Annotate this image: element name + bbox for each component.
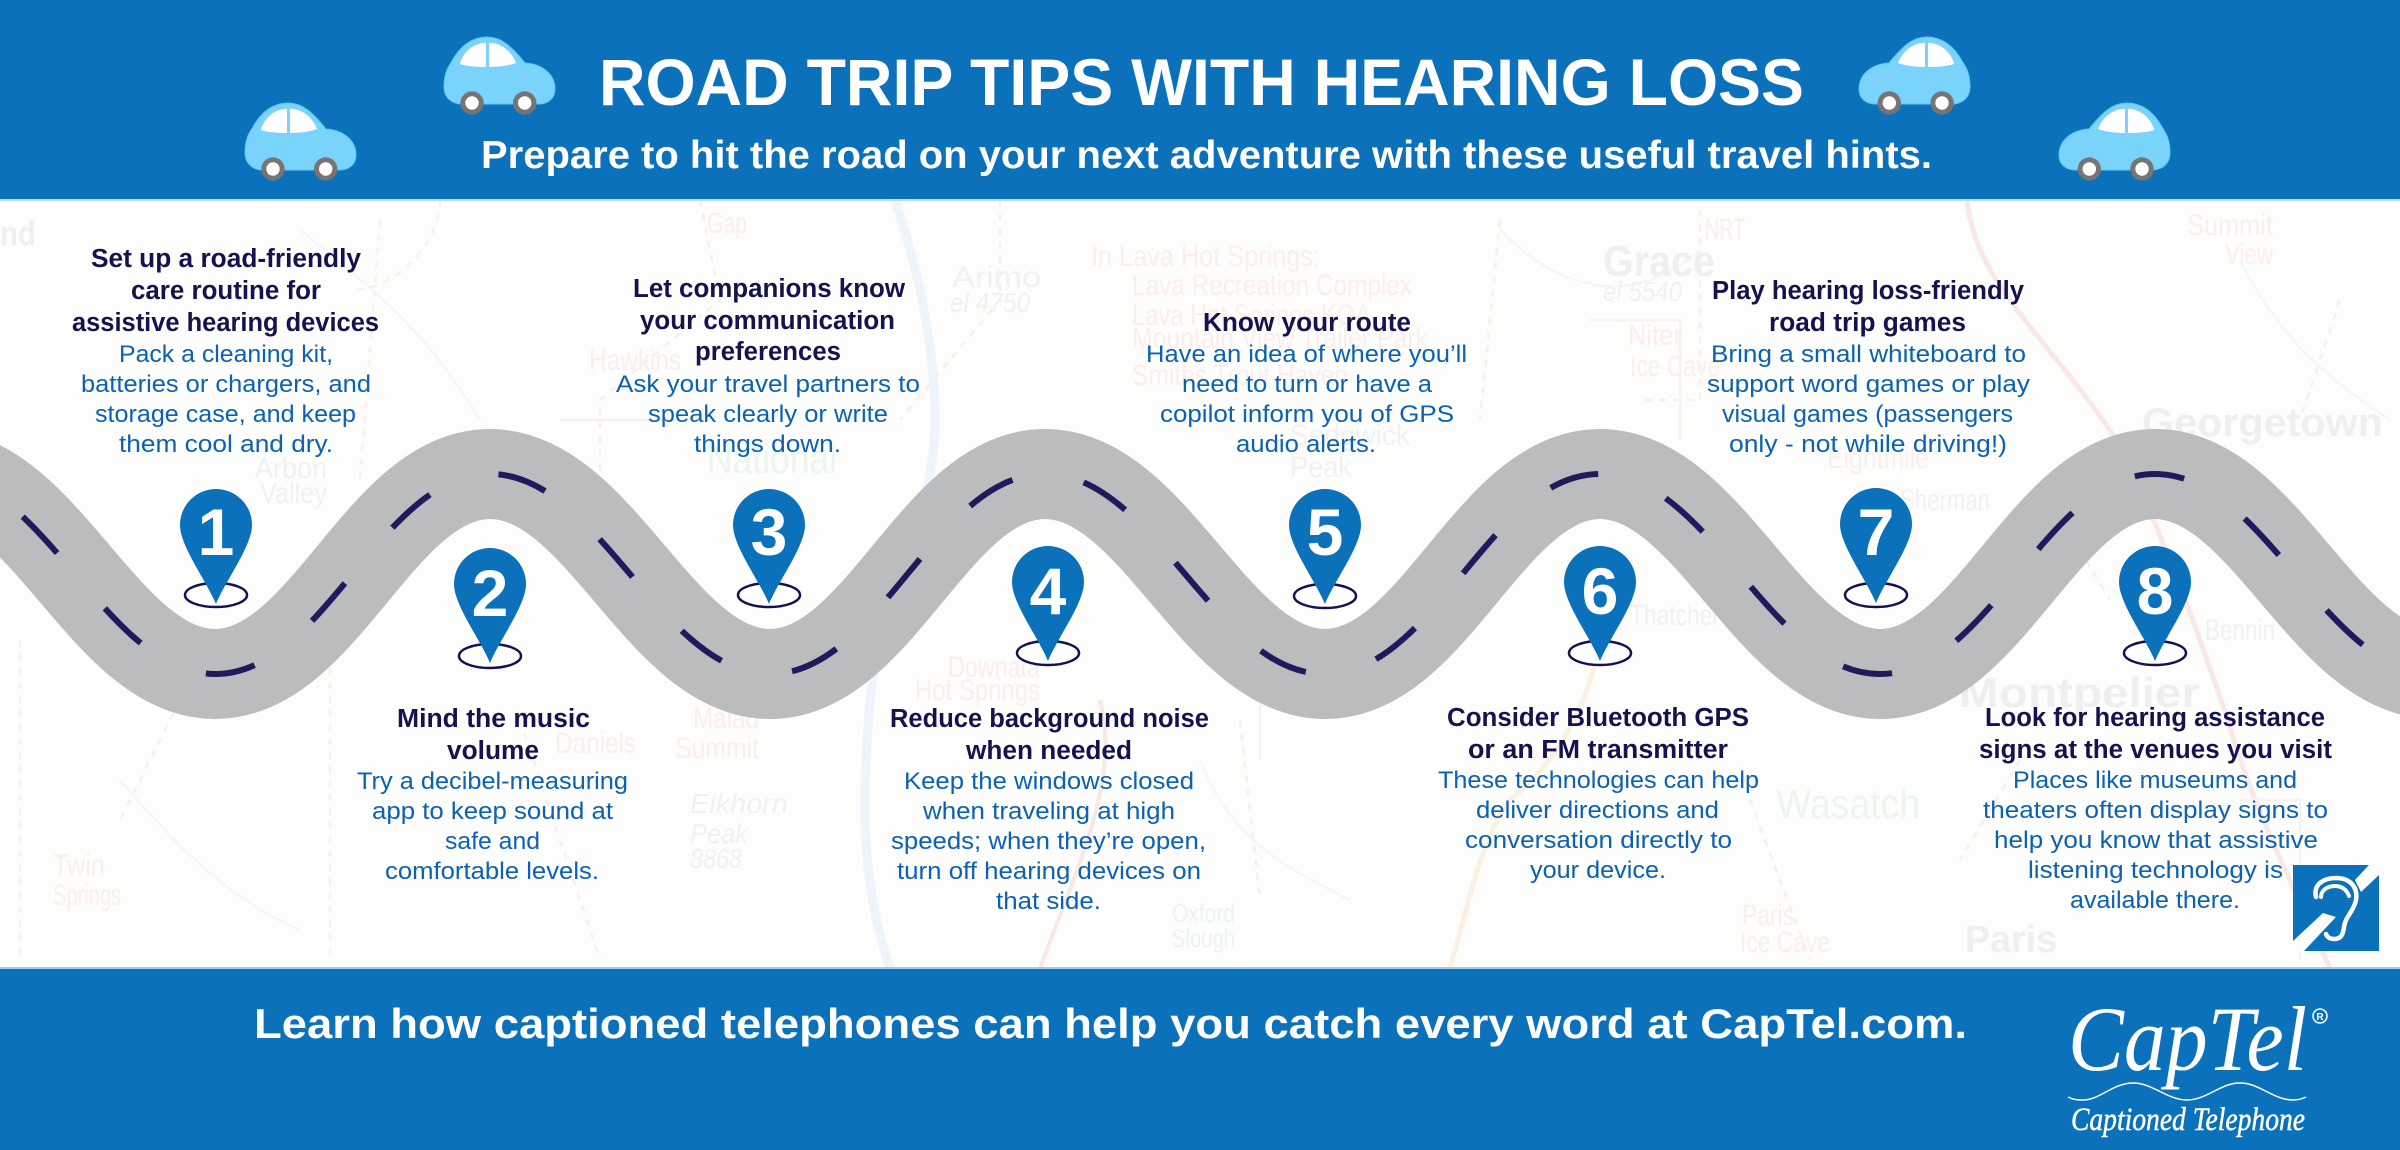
tip 1 text: assistive hearing devices xyxy=(72,309,379,337)
tip 3 text: preferences xyxy=(695,338,841,366)
map background: Daniels xyxy=(555,727,636,760)
tip 3 text: Let companions know xyxy=(633,275,905,303)
tip 8 text: theaters often display signs to xyxy=(1983,797,2328,824)
tip 6 text xyxy=(1438,704,1759,884)
icon: car far left xyxy=(245,103,356,181)
map background: Springs xyxy=(53,879,121,912)
tip 5 text: Know your route xyxy=(1203,309,1411,337)
tip 4 text: Reduce background noise xyxy=(890,705,1209,733)
tip 2 text: comfortable levels. xyxy=(385,858,599,885)
pin 5: 5 xyxy=(1307,495,1343,569)
map background: Bennin xyxy=(2205,614,2275,647)
pin 4 xyxy=(1012,546,1084,665)
tip 1 text: storage case, and keep xyxy=(95,401,356,428)
tip 4 text: Keep the windows closed xyxy=(904,768,1194,795)
map background: Hawkins xyxy=(589,344,681,377)
map background: Twin xyxy=(53,849,105,882)
tip 6 text: or an FM transmitter xyxy=(1468,736,1728,764)
map background: Lava Recreation Complex xyxy=(1132,269,1412,302)
winding road xyxy=(0,474,2400,674)
pin 7 xyxy=(1840,488,1912,607)
tip 8 text: Look for hearing assistance xyxy=(1985,704,2325,732)
map background: Montpelier xyxy=(1959,669,2200,716)
tip 7 text xyxy=(1707,277,2031,458)
tip 7 text: Bring a small whiteboard to xyxy=(1711,341,2026,368)
pin 5 xyxy=(1289,489,1361,608)
icon: car left of title xyxy=(444,37,555,115)
tip 2 text: Try a decibel-measuring xyxy=(357,768,628,795)
map background: View xyxy=(2225,238,2273,271)
subtitle: Prepare to hit the road on your next adventure with these useful travel hints. xyxy=(481,134,1932,177)
tip 3 text: things down. xyxy=(694,431,841,458)
map background: Mountain View Trailer Park xyxy=(1132,322,1429,355)
tip 6 text: These technologies can help xyxy=(1438,767,1759,794)
map background: nd xyxy=(0,215,36,253)
tip 5 text xyxy=(1146,309,1467,458)
pin 2: 2 xyxy=(472,556,508,630)
map background: 8868 xyxy=(690,843,742,874)
icon: car right of title xyxy=(1859,37,1970,115)
logo: CapTel xyxy=(2068,988,2327,1138)
tip 7 text: road trip games xyxy=(1769,309,1966,337)
tip 4 text: speeds; when they’re open, xyxy=(891,828,1206,855)
tip 6 text: conversation directly to xyxy=(1465,827,1732,854)
tip 4 text: when needed xyxy=(965,737,1132,765)
map background: Oxford xyxy=(1172,898,1235,928)
map background: Hot Springs xyxy=(915,674,1040,707)
tip 6 text: deliver directions and xyxy=(1476,797,1719,824)
tip 2 text: Mind the music xyxy=(397,705,590,733)
tip 5 text: Have an idea of where you’ll xyxy=(1146,341,1467,368)
tip 2 text: app to keep sound at xyxy=(372,798,613,825)
tip 4 text: turn off hearing devices on xyxy=(897,858,1201,885)
tip 8 text: Places like museums and xyxy=(2013,767,2297,794)
tip 2 text: safe and xyxy=(445,828,540,855)
map background: Downata xyxy=(948,651,1040,684)
tip 8 text: help you know that assistive xyxy=(1994,827,2318,854)
map background: Ice Cave xyxy=(1740,926,1830,959)
map background: National xyxy=(707,435,837,482)
tip 1 text xyxy=(72,245,379,458)
tip 7 text: visual games (passengers xyxy=(1722,401,2013,428)
tip 3 text: your communication xyxy=(640,307,895,335)
map background: Elkhorn xyxy=(690,788,788,819)
tip 7 text: Play hearing loss-friendly xyxy=(1712,277,2025,305)
tip 2 text xyxy=(357,705,628,885)
tip 5 text: need to turn or have a xyxy=(1182,371,1432,398)
tip 6 text: your device. xyxy=(1530,857,1666,884)
tip 6 text: Consider Bluetooth GPS xyxy=(1447,704,1749,732)
road centre dashes xyxy=(0,474,2400,674)
tip 8 text xyxy=(1979,704,2333,914)
logo: CapTel: Captioned Telephone xyxy=(2071,1102,2305,1138)
icon: car far right xyxy=(2059,103,2170,181)
tip 4 text xyxy=(890,705,1209,915)
tip 4 text: that side. xyxy=(996,888,1101,915)
pin 8 xyxy=(2119,546,2191,665)
icon: assistive listening ear xyxy=(2293,865,2379,951)
title: ROAD TRIP TIPS WITH HEARING LOSS xyxy=(599,45,1804,119)
pin 1: 1 xyxy=(198,495,234,569)
map background: Summit xyxy=(675,732,760,765)
tip 1 text: Set up a road-friendly xyxy=(91,245,362,273)
footer call to action: Learn how captioned telephones can help you catch every word at CapTel.com. xyxy=(254,1000,1967,1047)
map background: Thatcher xyxy=(1630,599,1720,632)
pin 6: 6 xyxy=(1582,554,1618,628)
tip 7 text: only - not while driving!) xyxy=(1729,431,2007,458)
tip 3 text: speak clearly or write xyxy=(648,401,888,428)
tip 8 text: listening technology is xyxy=(2028,857,2283,884)
tip 8 text: signs at the venues you visit xyxy=(1979,736,2333,764)
map background: Paris xyxy=(1742,899,1794,932)
map background: Malad xyxy=(693,702,759,735)
tip 1 text: Pack a cleaning kit, xyxy=(119,341,333,368)
pin 6 xyxy=(1564,546,1636,665)
map background: Ice Cave xyxy=(1630,350,1720,383)
logo: CapTel: CapTel xyxy=(2068,988,2307,1090)
tip 5 text: copilot inform you of GPS xyxy=(1160,401,1454,428)
tip 5 text: audio alerts. xyxy=(1236,431,1376,458)
pin 1 xyxy=(180,489,252,607)
map background: Peak xyxy=(690,818,750,849)
pin 4: 4 xyxy=(1030,554,1067,628)
map background xyxy=(0,200,2400,968)
map background: Valley xyxy=(260,477,327,510)
map background: Wasatch xyxy=(1776,780,1920,827)
pin 7: 7 xyxy=(1858,495,1894,569)
map background: Niter xyxy=(1628,319,1682,352)
tip 1 text: care routine for xyxy=(131,277,321,305)
map background: Arimo xyxy=(952,261,1041,294)
map background: Smiths Trout Haven xyxy=(1132,359,1348,392)
pin 8: 8 xyxy=(2137,554,2173,628)
tip 8 text: available there. xyxy=(2070,887,2240,914)
map background: Summit xyxy=(2187,209,2274,242)
tip 3 text xyxy=(616,275,920,458)
tip 1 text: batteries or chargers, and xyxy=(81,371,371,398)
tip 3 text: Ask your travel partners to xyxy=(616,371,920,398)
map background: Peak xyxy=(1290,451,1353,484)
map background: el 4750 xyxy=(950,287,1030,318)
footer panel xyxy=(0,967,2400,1150)
pin 3 xyxy=(733,489,805,607)
map background: Eightmile xyxy=(1827,442,1929,475)
map background: Gap xyxy=(707,207,747,240)
map background: NRT xyxy=(1705,213,1745,246)
map background: Georgetown xyxy=(2142,401,2383,445)
tip 7 text: support word games or play xyxy=(1707,371,2031,398)
map background: Grace xyxy=(1603,237,1715,286)
map background: el 5540 xyxy=(1603,276,1682,307)
header panel xyxy=(0,0,2400,201)
map background: Paris xyxy=(1965,919,2057,961)
map background: Arbon xyxy=(255,452,327,485)
logo: CapTel: R xyxy=(2316,1012,2324,1023)
map background: In Lava Hot Springs: xyxy=(1091,240,1320,273)
tip 1 text: them cool and dry. xyxy=(119,431,333,458)
map background: Lava Hot Springs KOA xyxy=(1132,299,1371,332)
map background: Sherman xyxy=(1900,484,1990,517)
pin 3: 3 xyxy=(751,495,787,569)
map background: Sedgwick xyxy=(1290,419,1411,452)
tip 4 text: when traveling at high xyxy=(922,798,1175,825)
tip 2 text: volume xyxy=(447,737,539,765)
map background: Slough xyxy=(1172,923,1235,953)
pin 2 xyxy=(454,548,526,668)
